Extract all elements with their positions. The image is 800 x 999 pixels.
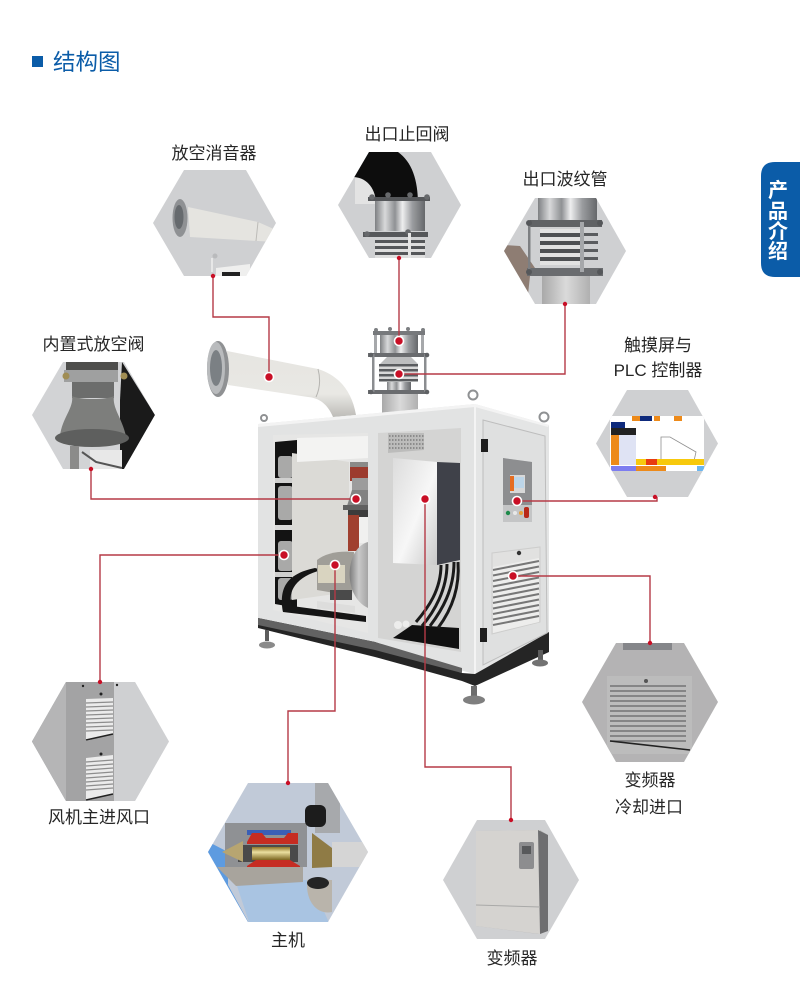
hexagon: outlet bellows <box>500 196 630 306</box>
side tab: product introduction: 品 <box>768 201 788 223</box>
label: outlet bellows: 出口波纹管 <box>522 170 608 189</box>
section heading: 结构图 <box>53 50 121 75</box>
label: touchscreen and PLC controller: PLC 控制器 <box>614 361 702 380</box>
cabinet body <box>258 404 549 686</box>
machine illustration <box>207 327 549 704</box>
callout dots <box>264 336 522 580</box>
left bay interior <box>273 433 368 633</box>
hexagon: outlet check valve <box>335 150 465 260</box>
label: blower main air inlet: 风机主进风口 <box>48 808 150 827</box>
inverter cables <box>416 562 458 628</box>
hexagon: built-in vent valve <box>30 360 158 472</box>
muffler pipe <box>207 341 356 417</box>
hexagon: vent muffler <box>150 168 280 278</box>
lifting eyes <box>261 390 548 422</box>
cooling inlet louvre <box>492 547 540 634</box>
connector end dots <box>89 256 657 822</box>
right bay interior <box>378 428 461 652</box>
label: vent muffler: 放空消音器 <box>172 144 256 163</box>
connector lines <box>91 258 657 820</box>
label: inverter: 变频器 <box>486 949 538 968</box>
side tab: product introduction: 绍 <box>768 240 788 263</box>
outlet valve and bellows stack <box>368 327 429 418</box>
control panel <box>503 458 532 522</box>
side tab: product introduction: 产 <box>768 179 788 202</box>
hexagon: inverter <box>440 818 582 941</box>
label: built-in vent valve: 内置式放空阀 <box>42 335 144 354</box>
hexagon: cooling inlet <box>580 641 720 764</box>
label: touchscreen and PLC controller <box>614 336 702 380</box>
label: outlet check valve: 出口止回阀 <box>364 125 450 144</box>
label: main unit: 主机 <box>271 931 305 950</box>
hexagon: blower air inlet <box>30 680 172 804</box>
label: touchscreen and PLC controller: 触摸屏与 <box>624 336 692 355</box>
hexagon: touchscreen and PLC controller <box>594 388 720 500</box>
label: inverter cooling inlet: 冷却进口 <box>615 798 683 817</box>
side tab: product introduction <box>761 162 800 277</box>
label: inverter cooling inlet <box>615 771 683 817</box>
inverter unit <box>393 458 460 565</box>
door hinges <box>480 439 488 642</box>
blower main unit <box>282 542 368 622</box>
side tab: product introduction: 介 <box>768 220 788 243</box>
label: inverter cooling inlet: 变频器 <box>624 771 676 790</box>
built-in vent valve column <box>343 462 368 551</box>
cabinet feet <box>259 630 548 704</box>
hexagon: main unit cutaway <box>205 780 371 925</box>
